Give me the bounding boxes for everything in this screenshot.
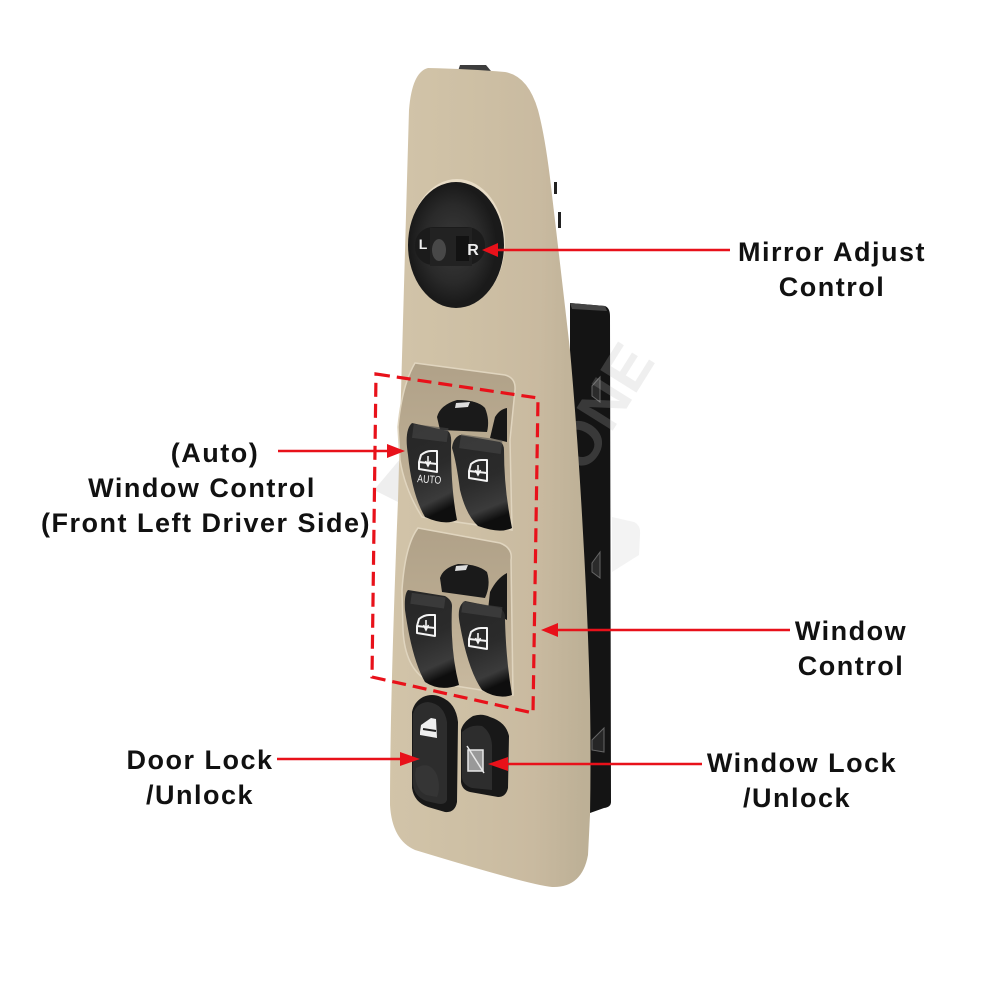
lower right window switch <box>459 601 512 697</box>
label: mirror adjust control <box>738 237 926 302</box>
door lock switch <box>412 695 458 812</box>
door icon <box>469 460 487 481</box>
label: mirror adjust control: Mirror Adjust <box>738 237 926 267</box>
label: auto window control: (Auto) <box>171 438 259 468</box>
door icon <box>469 628 487 649</box>
label: window lock <box>707 748 897 813</box>
window lock icon <box>467 746 484 773</box>
recess: lower window switches <box>402 528 513 695</box>
mirror adjust control <box>408 179 505 308</box>
label: door lock <box>126 745 274 810</box>
label: window control: Window <box>795 616 907 646</box>
arrow: auto window control <box>278 444 405 458</box>
rear black housing <box>554 182 611 813</box>
label: door lock: /Unlock <box>146 780 254 810</box>
label: door lock: Door Lock <box>126 745 274 775</box>
AUTO label: AUTO <box>417 473 442 487</box>
label: window lock: /Unlock <box>743 783 851 813</box>
watermark shapes <box>374 452 640 572</box>
label: mirror adjust control: Control <box>779 272 885 302</box>
arrow: door lock <box>277 752 420 766</box>
label: window lock: Window Lock <box>707 748 897 778</box>
window lock switch <box>461 715 509 797</box>
label: auto window control: Window Control <box>88 473 316 503</box>
door icon <box>417 615 435 636</box>
upper right window switch <box>452 434 512 531</box>
arrow: mirror adjust <box>482 243 730 257</box>
upper left window switch <box>407 400 507 522</box>
dashed red outline <box>372 374 538 713</box>
label: window control <box>795 616 907 681</box>
recess: upper window switches <box>398 363 515 530</box>
label: auto window control <box>41 438 371 538</box>
label: auto window control: (Front Left Driver Side) <box>41 508 371 538</box>
top clip <box>458 65 491 71</box>
arrow: window lock <box>488 757 702 771</box>
door icon <box>419 451 437 472</box>
label: window control: Control <box>798 651 904 681</box>
L label: L <box>419 236 428 252</box>
lower left window switch <box>405 564 507 688</box>
R label: R <box>467 242 479 259</box>
door key icon <box>420 718 437 738</box>
arrow: window control <box>541 623 790 637</box>
beige panel <box>390 68 590 887</box>
watermark text: ONE <box>538 332 668 482</box>
